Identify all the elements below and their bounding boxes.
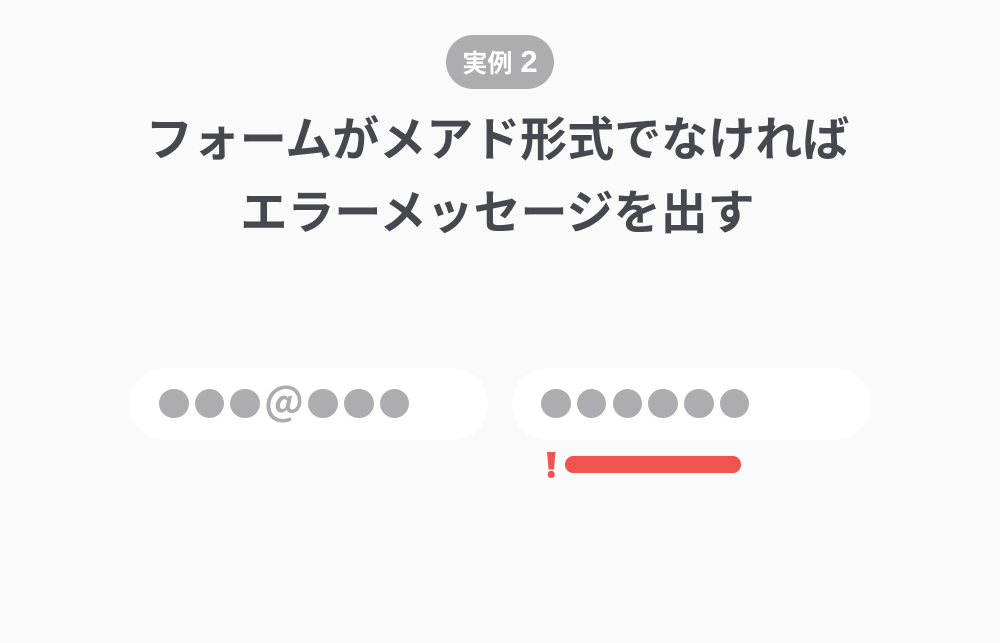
title bbox=[146, 113, 849, 239]
icon: exclamation mark bbox=[547, 452, 556, 478]
panel: invalid email field bbox=[512, 368, 870, 440]
title: フォームがメアド形式でなければ bbox=[146, 113, 849, 166]
masked email input: @ bbox=[264, 371, 304, 427]
badge: example 2: 実例 2 bbox=[462, 44, 538, 79]
error message bar bbox=[565, 456, 741, 472]
panel: valid email field bbox=[130, 368, 488, 440]
badge: example 2 bbox=[446, 35, 554, 89]
title: エラーメッセージを出す bbox=[240, 186, 755, 239]
